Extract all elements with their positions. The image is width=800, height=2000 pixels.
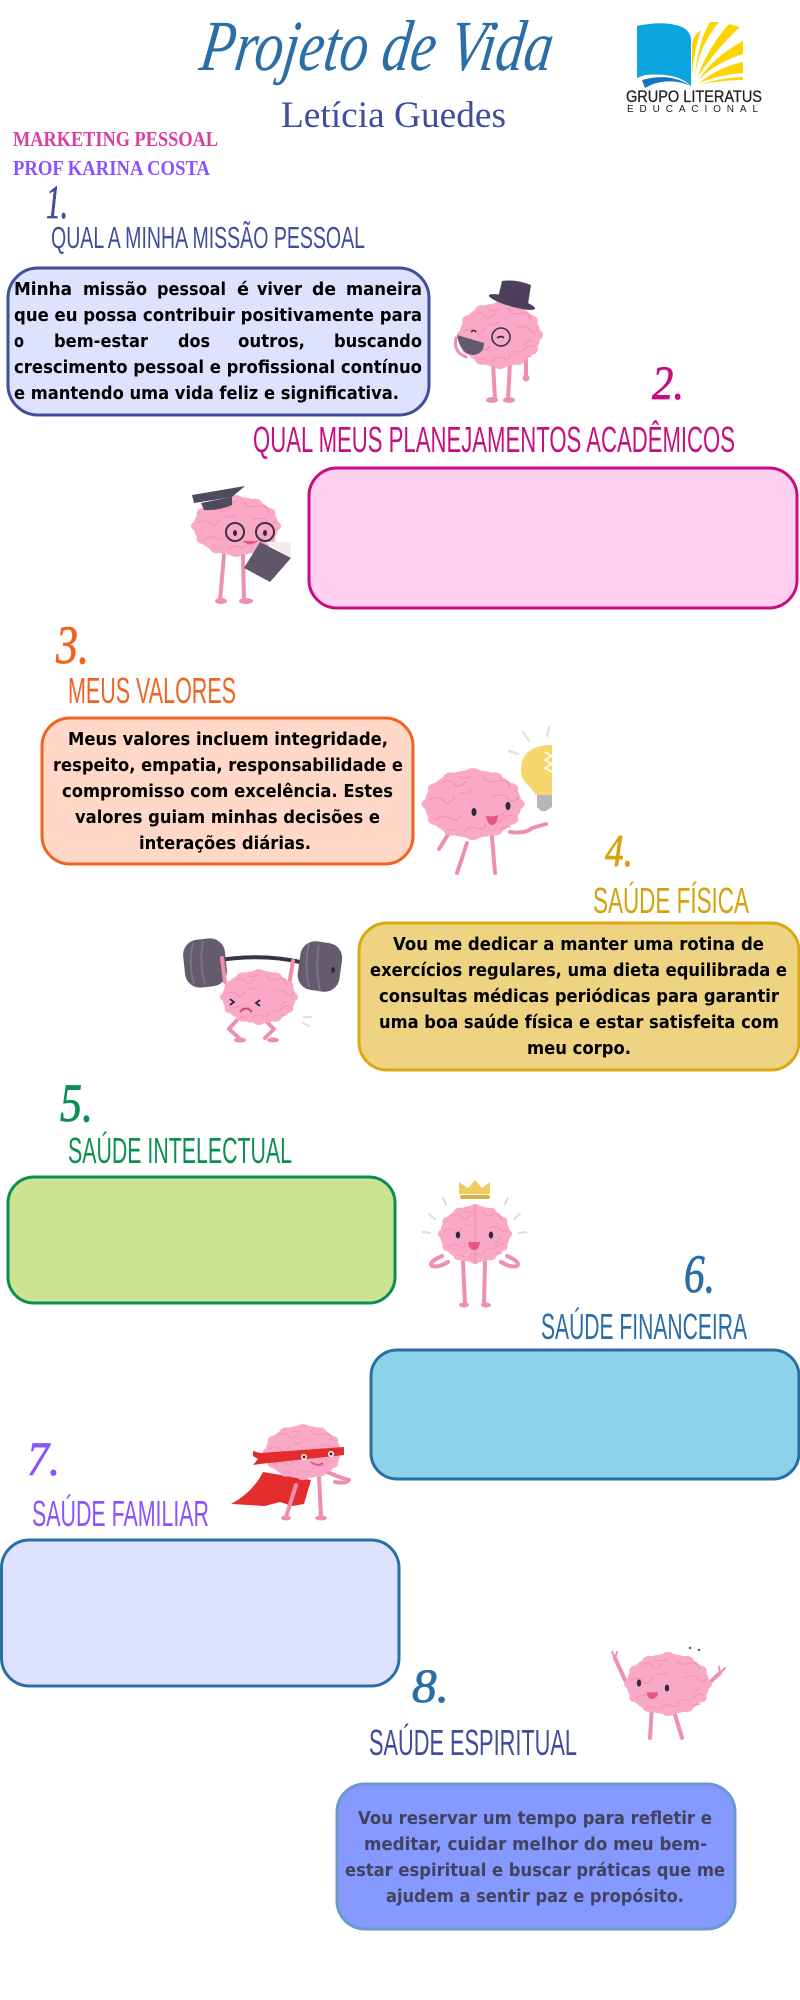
icon: brain with graduation cap and book — [191, 486, 291, 604]
panel: missão pessoal — [8, 268, 429, 415]
panel text: de — [312, 280, 336, 300]
icon: superhero brain with cape — [231, 1424, 349, 1520]
section 5 heading: SAÚDE INTELECTUAL — [68, 1130, 292, 1171]
section 1 number: 1. — [46, 176, 68, 229]
title: Projeto de Vida — [195, 6, 559, 86]
panel text: pessoal — [157, 280, 226, 300]
panel text: outros, — [238, 332, 305, 352]
section 4 number: 4. — [605, 825, 633, 876]
panel text: uma boa saúde física e estar satisfeita com — [379, 1013, 779, 1033]
section 3 heading: MEUS VALORES — [68, 670, 236, 711]
panel text: meditar, cuidar melhor do meu bem- — [364, 1835, 707, 1855]
professor label: PROF KARINA COSTA — [13, 156, 211, 180]
panel text: crescimento pessoal e profissional contínuo — [14, 358, 422, 378]
panel: saúde intelectual — [8, 1177, 395, 1303]
section 8 heading: SAÚDE ESPIRITUAL — [369, 1722, 577, 1763]
panel text: Vou me dedicar a manter uma rotina de — [393, 935, 764, 955]
panel text: missão — [83, 280, 147, 300]
panel text: valores guiam minhas decisões e — [75, 808, 380, 828]
logo: Grupo Literatus — [626, 22, 762, 115]
panel text: estar espiritual e buscar práticas que me — [345, 1861, 725, 1881]
panel text — [370, 935, 787, 1059]
panel text: Meus valores incluem integridade, — [68, 730, 388, 750]
panel: saúde espiritual — [337, 1784, 735, 1929]
icon: brain with top hat and cup — [455, 280, 543, 403]
panel text: consultas médicas periódicas para garantir — [379, 987, 779, 1007]
panel text: o — [14, 332, 24, 352]
section 2 number: 2. — [652, 357, 684, 410]
logo subtitle: EDUCACIONAL — [627, 104, 758, 115]
section 8 number: 8. — [412, 1660, 449, 1713]
icon: brain with light bulb — [422, 727, 552, 873]
panel text: ajudem a sentir paz e propósito. — [386, 1887, 684, 1907]
section 7 number: 7. — [27, 1433, 60, 1486]
section 6 number: 6. — [684, 1244, 715, 1304]
panel text: bem-estar — [54, 332, 148, 352]
panel text: é — [237, 280, 249, 300]
panel text: que eu possa contribuir positivamente para — [14, 306, 422, 326]
panel text — [14, 280, 422, 404]
panel: valores — [42, 718, 413, 864]
panel text: Minha — [14, 280, 72, 300]
section 3 number: 3. — [55, 615, 89, 675]
panel text: respeito, empatia, responsabilidade e — [53, 756, 403, 776]
panel text: interações diárias. — [139, 834, 311, 854]
logo wordmark: GRUPO LITERATUS — [626, 87, 762, 106]
section 1 heading: QUAL A MINHA MISSÃO PESSOAL — [51, 220, 365, 255]
panel text: maneira — [346, 280, 422, 300]
panel text: meu corpo. — [527, 1039, 631, 1059]
panel text: buscando — [334, 332, 422, 352]
icon: brain with crown — [423, 1180, 526, 1308]
panel: planejamentos acadêmicos — [309, 468, 797, 608]
panel text: compromisso com excelência. Estes — [62, 782, 393, 802]
panel text: Vou reservar um tempo para refletir e — [358, 1809, 712, 1829]
icon: brain cheering — [612, 1647, 725, 1738]
icon: brain lifting barbell — [182, 937, 344, 1042]
panel text: viver — [257, 280, 302, 300]
panel: saúde física — [359, 923, 799, 1070]
course label: MARKETING PESSOAL — [13, 127, 218, 151]
panel text: dos — [178, 332, 210, 352]
panel: saúde financeira — [371, 1350, 799, 1479]
author name: Letícia Guedes — [281, 95, 506, 136]
panel text: e mantendo uma vida feliz e significativa. — [14, 384, 399, 404]
panel: saúde familiar — [2, 1540, 399, 1686]
section 7 heading: SAÚDE FAMILIAR — [32, 1493, 209, 1534]
panel text — [345, 1809, 725, 1907]
section 5 number: 5. — [60, 1073, 93, 1133]
panel text — [53, 730, 403, 854]
